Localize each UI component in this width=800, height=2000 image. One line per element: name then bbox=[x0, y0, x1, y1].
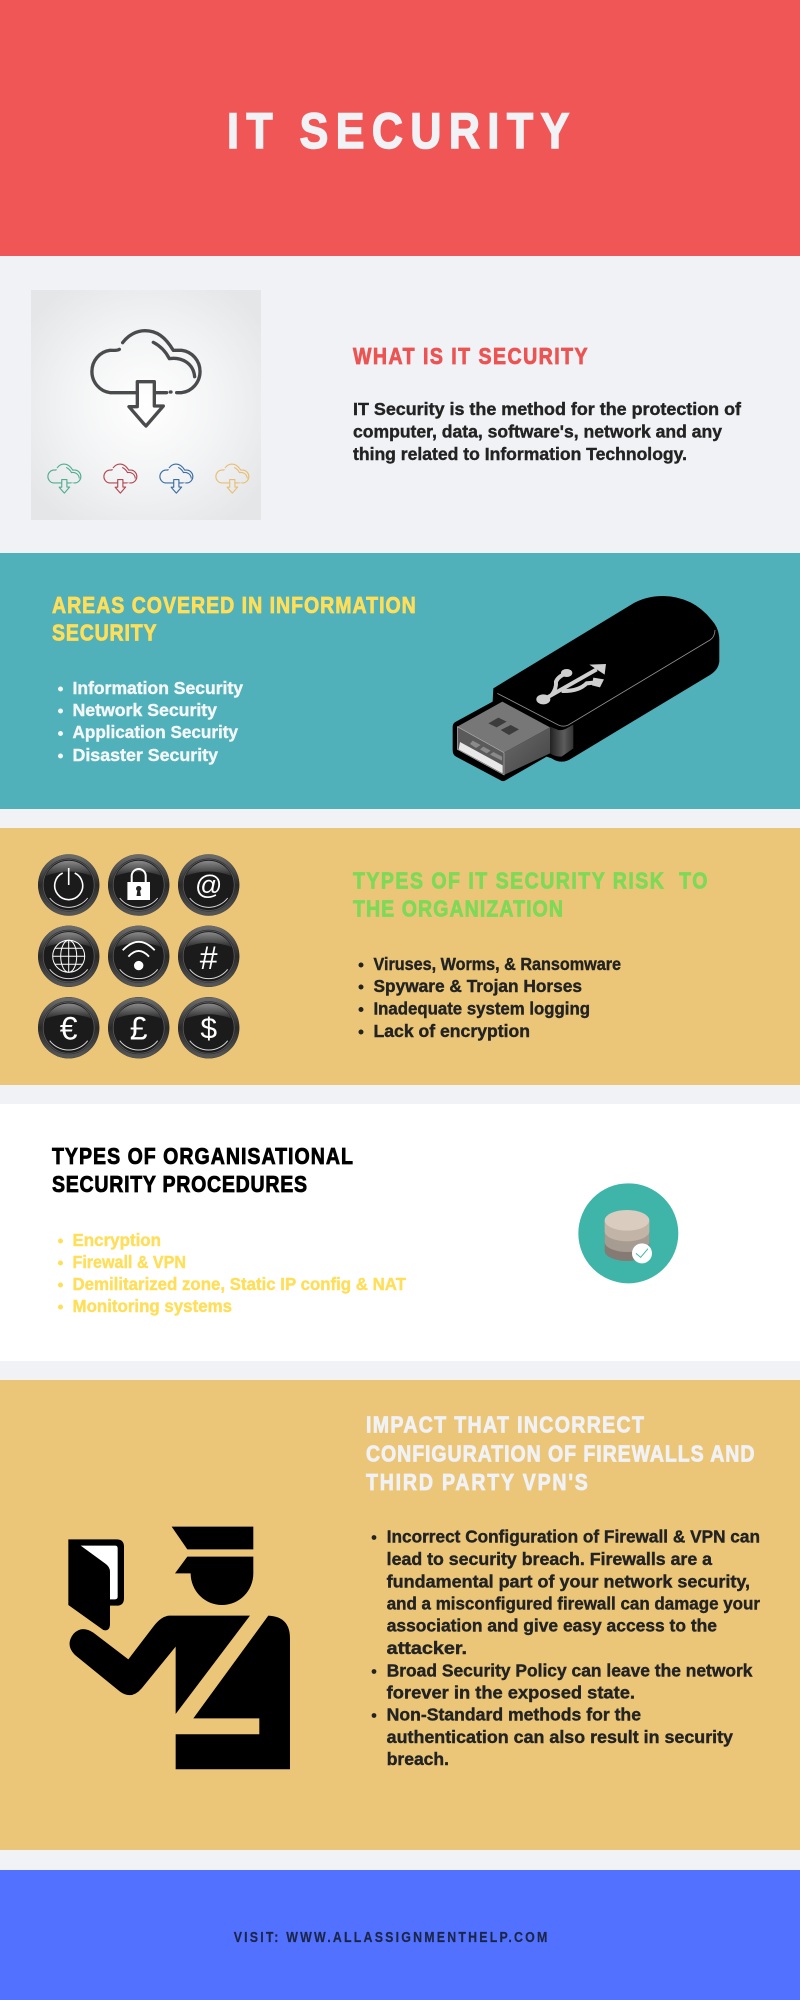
heading: organisational procedures bbox=[52, 1144, 353, 1197]
heading: impact bbox=[366, 1412, 754, 1495]
list: procedures: Encryption bbox=[72, 1230, 161, 1250]
icon: euro button: € bbox=[60, 1011, 78, 1047]
list: procedures: Monitoring systems bbox=[72, 1296, 232, 1316]
title: IT SECURITY bbox=[227, 103, 569, 159]
heading: what is IT security: WHAT IS IT SECURITY bbox=[353, 344, 588, 369]
heading: areas covered bbox=[52, 593, 416, 646]
heading: organisational procedures: SECURITY PROCEDURES bbox=[52, 1172, 307, 1197]
icon: cloud download picture bbox=[31, 290, 261, 520]
icon: officer checking passport bbox=[68, 1527, 290, 1769]
list: impacts: fundamental part of your network security, bbox=[387, 1572, 750, 1592]
icon: dollar button bbox=[178, 997, 239, 1058]
heading: organisational procedures: TYPES OF ORGANISATIONAL bbox=[52, 1144, 353, 1169]
panel: impact of incorrect configuration bbox=[0, 1380, 800, 1850]
heading: impact: IMPACT THAT INCORRECT bbox=[366, 1412, 644, 1438]
heading: types of risk: TYPES OF IT SECURITY RISK TO bbox=[353, 868, 707, 894]
icon: hash button bbox=[178, 926, 239, 987]
list: procedures bbox=[58, 1230, 406, 1316]
text block: definition: thing related to Information Technology. bbox=[353, 444, 687, 464]
list: impacts: authentication can also result in security bbox=[387, 1727, 733, 1747]
heading: areas covered: AREAS COVERED IN INFORMATION bbox=[52, 593, 416, 618]
list: procedures: Firewall & VPN bbox=[72, 1252, 186, 1272]
panel: types of risk bbox=[0, 828, 800, 1085]
list: impacts: association and give easy access to the bbox=[387, 1616, 717, 1636]
icon: hash button: # bbox=[200, 940, 218, 976]
list: impacts: Broad Security Policy can leave the network bbox=[387, 1661, 753, 1681]
icon: globe button bbox=[38, 926, 99, 987]
icon: blue cloud bbox=[160, 464, 193, 493]
heading: types of risk: THE ORGANIZATION bbox=[353, 896, 563, 922]
list: impacts: Non-Standard methods for the bbox=[387, 1704, 641, 1724]
list: impacts: Incorrect Configuration of Firewall & VPN can bbox=[387, 1526, 760, 1546]
icon: at sign button: @ bbox=[195, 870, 222, 900]
text block: definition: IT Security is the method for the protection of bbox=[353, 399, 741, 419]
icon: pound button bbox=[108, 997, 169, 1058]
icon: pound button: £ bbox=[130, 1011, 148, 1047]
panel: areas covered bbox=[0, 553, 800, 809]
list: risks: Viruses, Worms, & Ransomware bbox=[374, 954, 621, 974]
list: risks: Inadequate system logging bbox=[374, 998, 590, 1018]
heading: types of risk bbox=[353, 868, 707, 922]
icon: large cloud bbox=[92, 331, 200, 426]
icon: green cloud bbox=[48, 464, 81, 493]
icon: USB drive bbox=[453, 596, 719, 781]
list: risks: Spyware & Trojan Horses bbox=[374, 976, 582, 996]
list: impacts: forever in the exposed state. bbox=[387, 1682, 635, 1702]
icon: euro button bbox=[38, 997, 99, 1058]
panel: organisational procedures bbox=[0, 1104, 800, 1361]
list: impacts: lead to security breach. Firewalls are a bbox=[387, 1549, 712, 1569]
panel: what is IT security bbox=[0, 256, 800, 553]
list: areas: Information Security bbox=[72, 678, 243, 698]
list: procedures: Demilitarized zone, Static IP config & NAT bbox=[72, 1274, 406, 1294]
list: impacts: breach. bbox=[387, 1749, 449, 1769]
list: impacts bbox=[372, 1526, 760, 1769]
list: risks: Lack of encryption bbox=[374, 1021, 530, 1041]
list: impacts: attacker. bbox=[387, 1638, 467, 1658]
heading: areas covered: SECURITY bbox=[52, 620, 157, 646]
list: impacts: and a misconfigured firewall can damage your bbox=[387, 1593, 760, 1613]
footer link text: VISIT: WWW.ALLASSIGNMENTHELP.COM bbox=[234, 1929, 547, 1945]
icon: orange cloud bbox=[216, 464, 249, 493]
icon: power button bbox=[38, 854, 99, 916]
icon: padlock button bbox=[108, 854, 169, 916]
heading: impact: CONFIGURATION OF FIREWALLS AND bbox=[366, 1441, 754, 1467]
icon: at sign button bbox=[178, 854, 239, 916]
heading: impact: THIRD PARTY VPN'S bbox=[366, 1470, 588, 1495]
header band bbox=[0, 0, 800, 256]
text block: definition bbox=[353, 399, 741, 464]
list: areas bbox=[58, 678, 243, 765]
list: areas: Network Security bbox=[72, 700, 217, 720]
footer band bbox=[0, 1870, 800, 2000]
list: risks bbox=[359, 954, 621, 1041]
icon: button grid bbox=[38, 854, 239, 1058]
list: areas: Application Security bbox=[72, 722, 238, 742]
icon: wifi button bbox=[108, 926, 169, 987]
icon: red cloud bbox=[104, 464, 137, 493]
icon: dollar button: $ bbox=[200, 1013, 217, 1046]
list: areas: Disaster Security bbox=[72, 745, 218, 765]
icon: database check bbox=[578, 1183, 678, 1283]
text block: definition: computer, data, software's, network and any bbox=[353, 422, 722, 442]
